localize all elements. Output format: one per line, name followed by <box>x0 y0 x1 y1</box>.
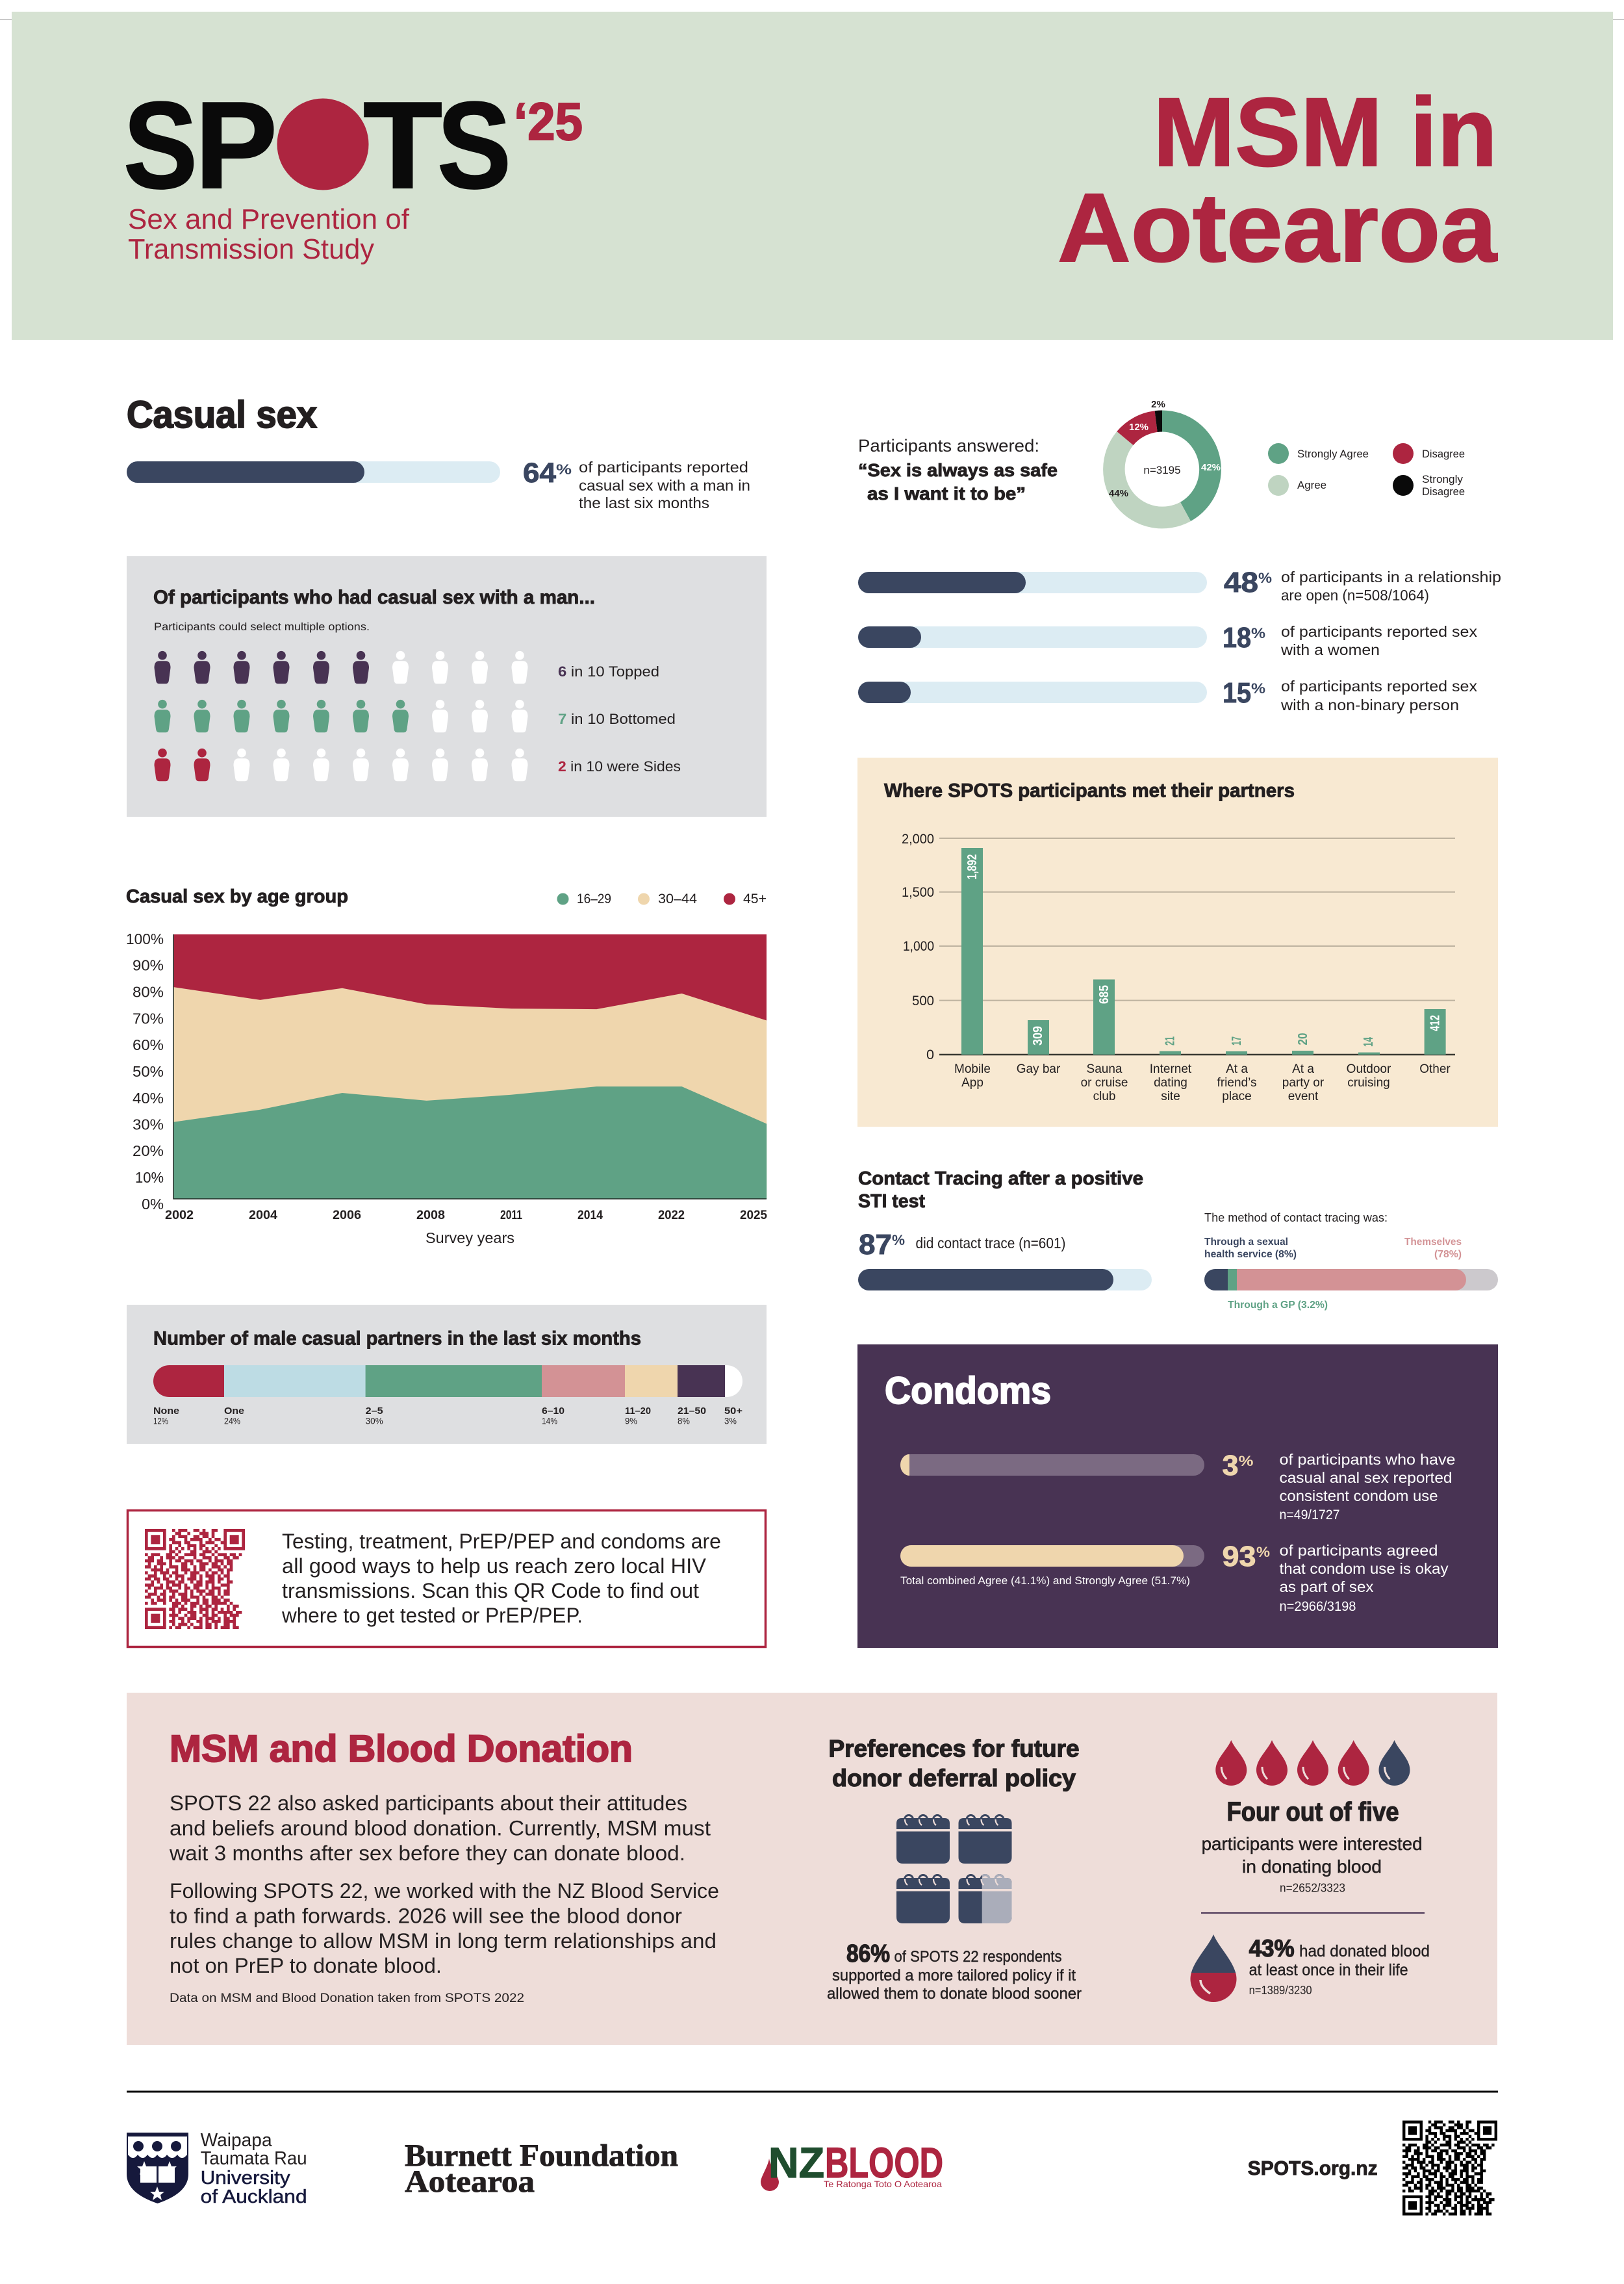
x axis labels: 2022 <box>658 1209 685 1222</box>
contact tracing method bar: (78%) <box>1434 1249 1462 1260</box>
bar category labels: Internet <box>1150 1062 1192 1076</box>
segment labels: 50+ <box>724 1405 742 1417</box>
bar value labels <box>965 854 1442 1047</box>
bar value labels: 14 <box>1362 1036 1376 1047</box>
panel: where participants met partners <box>857 758 1498 1127</box>
main title <box>1058 77 1498 282</box>
body text <box>169 1791 719 1977</box>
logo: University of Auckland: Taumata Rau <box>201 2148 307 2169</box>
pictogram row: topped <box>155 651 659 684</box>
stat: 43 percent: had donated blood <box>1299 1942 1430 1960</box>
donut legend <box>1268 443 1465 498</box>
QR code: website <box>1402 2122 1497 2214</box>
body text: not on PrEP to donate blood. <box>170 1954 442 1977</box>
logo: NZ Blood <box>761 2138 943 2191</box>
website link: SPOTS.org.nz <box>1248 2157 1378 2179</box>
logo subtitle <box>128 203 410 265</box>
panel: MSM and blood donation <box>127 1693 1497 2045</box>
y axis labels: 20% <box>133 1142 164 1159</box>
bar category labels: or cruise <box>1081 1076 1128 1090</box>
contact tracing heading: STI test <box>858 1191 925 1212</box>
stat: 87 percent contact trace: % <box>892 1232 905 1248</box>
SPOTS logo: ‘25 <box>514 92 583 151</box>
bar category labels <box>954 1062 1451 1103</box>
segment labels: 14% <box>542 1415 557 1426</box>
stat: 18 percent sex with women: 18 <box>1223 622 1251 654</box>
chart legend: 45+ <box>743 892 767 906</box>
segment labels: 11–20 <box>625 1405 651 1417</box>
stat: 93 percent agreed: of participants agreed <box>1280 1542 1438 1559</box>
stat: 93 percent agreed: as part of sex <box>1280 1578 1374 1595</box>
segment labels: 8% <box>678 1415 690 1426</box>
segment labels: One <box>224 1405 244 1417</box>
segment labels: 12% <box>153 1415 168 1426</box>
stat: 93 percent agreed <box>900 1541 1449 1614</box>
stat: 43 percent: n=1389/3230 <box>1249 1984 1312 1997</box>
stat: 48 percent open relationship: 48 <box>1224 567 1258 598</box>
stat: 64 percent casual sex: casual sex with a man in <box>579 477 750 494</box>
logo: University of Auckland: University <box>201 2168 290 2188</box>
callout text: all good ways to help us reach zero local HIV <box>282 1554 707 1578</box>
y axis labels: 40% <box>133 1090 164 1107</box>
donut legend: Agree <box>1297 479 1326 491</box>
bar category labels: At a <box>1292 1062 1314 1076</box>
SPOTS logo: S <box>437 77 511 214</box>
panel: number of male casual partners <box>127 1305 767 1444</box>
bar category labels: friend’s <box>1217 1076 1256 1090</box>
segment labels: 2–5 <box>366 1405 383 1417</box>
panel: positions pictogram <box>127 556 767 817</box>
logo: NZ Blood: Te Ratonga Toto O Aotearoa <box>824 2179 942 2189</box>
stat: 15 percent sex with non-binary person: with a non-binary person <box>1280 697 1459 713</box>
y axis labels: 1,000 <box>903 939 934 954</box>
donut legend: Strongly <box>1422 473 1463 485</box>
contact tracing method bar: health service (8%) <box>1204 1249 1297 1260</box>
body text: Following SPOTS 22, we worked with the NZ Blood Service <box>170 1879 719 1903</box>
panel: condoms <box>857 1344 1498 1648</box>
stat: 48 percent open relationship: % <box>1258 570 1272 586</box>
bar category labels: event <box>1288 1090 1319 1103</box>
panel heading: Of participants who had casual sex with a man... <box>153 587 595 608</box>
heading: casual sex: Casual sex <box>127 394 317 436</box>
contact tracing method bar: Through a sexual <box>1204 1237 1288 1248</box>
stat: 43 percent <box>1249 1935 1430 1997</box>
donut chart: 12% <box>1129 422 1148 433</box>
SPOTS logo: T <box>363 77 442 214</box>
stat: 15 percent sex with non-binary person: 15 <box>1223 677 1251 709</box>
y axis labels: 10% <box>135 1169 164 1186</box>
stat: 18 percent sex with women: % <box>1251 625 1265 641</box>
question text: as I want it to be” <box>867 483 1026 504</box>
deferral policy heading: Preferences for future <box>829 1735 1080 1762</box>
header banner <box>12 12 1613 340</box>
contact tracing method bar <box>1204 1211 1498 1311</box>
stat: 64 percent casual sex: % <box>556 461 572 478</box>
bar chart grid and axis <box>939 838 1455 1055</box>
panel heading: Where SPOTS participants met their partners <box>884 780 1295 802</box>
logo subtitle: Transmission Study <box>128 233 374 265</box>
panel heading: MSM and Blood Donation <box>170 1728 633 1770</box>
y axis labels: 2,000 <box>902 832 934 847</box>
chart: casual sex by age group <box>126 886 767 1246</box>
data source note: Data on MSM and Blood Donation taken from SPOTS 2022 <box>170 1992 524 2005</box>
bar category labels: At a <box>1226 1062 1248 1076</box>
bar category labels: Mobile <box>954 1062 991 1076</box>
stat: 64 percent casual sex <box>127 457 750 511</box>
logo: NZ Blood: BLOOD <box>825 2138 943 2187</box>
contact tracing method bar: Themselves <box>1404 1237 1462 1248</box>
logo: University of Auckland: Waipapa <box>201 2130 272 2151</box>
y axis labels <box>902 832 934 1062</box>
logo: NZ Blood: NZ <box>768 2138 824 2187</box>
segment labels: 3% <box>724 1415 737 1426</box>
bar category labels: App <box>961 1076 983 1090</box>
x axis labels: Survey years <box>425 1229 514 1246</box>
bar category labels: party or <box>1282 1076 1325 1090</box>
chart heading: Casual sex by age group <box>126 886 348 907</box>
bar category labels: site <box>1161 1090 1180 1103</box>
callout text: Testing, treatment, PrEP/PEP and condoms are <box>282 1530 721 1553</box>
stat: 93 percent agreed: that condom use is okay <box>1280 1560 1449 1577</box>
y axis labels: 1,500 <box>902 885 934 900</box>
chart legend <box>557 892 767 906</box>
main title: Aotearoa <box>1058 173 1498 282</box>
x axis labels: 2006 <box>333 1209 361 1222</box>
bar category labels: club <box>1093 1090 1115 1103</box>
bar category labels: Other <box>1419 1062 1451 1076</box>
x axis labels: 2025 <box>740 1209 767 1222</box>
question text: “Sex is always as safe <box>858 460 1058 480</box>
stat: 48 percent open relationship <box>858 567 1501 604</box>
SPOTS logo <box>123 77 583 214</box>
logo: Burnett Foundation Aotearoa <box>405 2138 678 2199</box>
segmented bar <box>153 1365 742 1397</box>
stat: 18 percent sex with women: with a women <box>1280 641 1380 658</box>
stat: 18 percent sex with women <box>858 622 1478 658</box>
y axis labels: 80% <box>133 984 164 1001</box>
pictogram row: bottomed <box>155 700 676 732</box>
x axis labels: 2004 <box>249 1209 277 1222</box>
question text <box>858 436 1058 504</box>
bar value labels: 20 <box>1296 1033 1310 1045</box>
stat: 18 percent sex with women: of participants reported sex <box>1281 623 1478 640</box>
stat: four out of five: participants were interested <box>1202 1834 1423 1854</box>
bar category labels: Outdoor <box>1347 1062 1391 1076</box>
stat: 93 percent agreed: % <box>1256 1544 1270 1560</box>
callout text <box>281 1530 721 1627</box>
x axis labels: 2011 <box>500 1209 522 1222</box>
stat: 64 percent casual sex: of participants reported <box>579 459 748 476</box>
segment labels: 30% <box>366 1415 383 1426</box>
stat: 93 percent agreed: Total combined Agree (41.1%) and Strongly Agree (51.7%) <box>900 1574 1190 1587</box>
donut chart: n=3195 <box>1143 464 1181 476</box>
pictogram row: topped: 6 in 10 Topped <box>558 663 659 680</box>
donut legend: Disagree <box>1422 448 1465 460</box>
stat: 3 percent consistent use: consistent condom use <box>1280 1487 1438 1504</box>
segment labels: 6–10 <box>542 1405 565 1417</box>
segment labels: 21–50 <box>678 1405 706 1417</box>
stat: four out of five <box>1202 1797 1423 1895</box>
SPOTS logo: P <box>195 77 277 214</box>
contact tracing method bar: Through a GP (3.2%) <box>1228 1300 1328 1311</box>
stat: four out of five: in donating blood <box>1242 1856 1382 1877</box>
x axis labels <box>165 1209 767 1246</box>
stat: four out of five: n=2652/3323 <box>1280 1882 1345 1895</box>
stacked area plot <box>173 934 767 1199</box>
bars <box>961 848 1446 1055</box>
bar category labels: Sauna <box>1087 1062 1123 1076</box>
stat: 93 percent agreed: 93 <box>1223 1541 1256 1572</box>
stat: 3 percent consistent use: casual anal sex reported <box>1280 1469 1453 1486</box>
QR code <box>145 1530 245 1628</box>
logo: University of Auckland <box>127 2130 307 2207</box>
body text: to find a path forwards. 2026 will see the blood donor <box>170 1904 682 1927</box>
question text: Participants answered: <box>858 436 1039 456</box>
body text: SPOTS 22 also asked participants about their attitudes <box>170 1791 687 1815</box>
chart legend: 30–44 <box>658 892 697 906</box>
logo subtitle: Sex and Prevention of <box>128 203 410 235</box>
stat: 3 percent consistent use <box>900 1450 1455 1522</box>
stat: 15 percent sex with non-binary person <box>858 677 1478 713</box>
bar value labels: 21 <box>1163 1036 1177 1046</box>
segment labels <box>153 1405 742 1426</box>
y axis labels: 0% <box>142 1196 164 1213</box>
deferral policy heading <box>829 1735 1080 1791</box>
pictogram row: sides: 2 in 10 were Sides <box>558 758 681 775</box>
segment labels: 9% <box>625 1415 637 1426</box>
stat: 43 percent: at least once in their life <box>1249 1961 1408 1979</box>
donut chart: 42% <box>1201 462 1221 473</box>
stat: 43 percent: 43% <box>1249 1935 1295 1962</box>
stat: 15 percent sex with non-binary person: of participants reported sex <box>1281 678 1478 695</box>
donut chart: 2% <box>1151 399 1165 410</box>
stat: 87 percent contact trace: did contact trace (n=601) <box>916 1235 1065 1251</box>
stat: 3 percent consistent use: % <box>1238 1453 1254 1469</box>
icon: half filled blood drop <box>1190 1934 1237 2002</box>
pictogram row: bottomed: 7 in 10 Bottomed <box>558 711 676 727</box>
y axis labels: 0 <box>926 1047 934 1062</box>
y axis labels: 90% <box>133 956 164 973</box>
stat: 86 percent: of SPOTS 22 respondents <box>894 1948 1061 1966</box>
stat: 48 percent open relationship: are open (n=508/1064) <box>1281 587 1429 604</box>
stat: 86 percent: 86% <box>846 1940 890 1968</box>
y axis labels: 60% <box>133 1036 164 1053</box>
logo: Burnett Foundation Aotearoa: Aotearoa <box>405 2164 535 2199</box>
stat: 48 percent open relationship: of participants in a relationship <box>1281 569 1501 585</box>
logo: University of Auckland: of Auckland <box>201 2187 307 2207</box>
stat: 15 percent sex with non-binary person: % <box>1251 680 1265 697</box>
icon: calendars <box>896 1816 1012 1923</box>
stat: 87 percent contact trace: 87 <box>859 1229 892 1261</box>
y axis labels <box>126 930 164 1213</box>
panel heading: Condoms <box>885 1370 1051 1412</box>
panel heading: Number of male casual partners in the last six months <box>153 1328 641 1349</box>
bar value labels: 1,892 <box>965 854 980 880</box>
callout text: where to get tested or PrEP/PEP. <box>281 1604 583 1627</box>
donut chart: 44% <box>1109 488 1128 499</box>
contact tracing heading: Contact Tracing after a positive <box>858 1168 1143 1189</box>
bar value labels: 309 <box>1031 1026 1045 1046</box>
chart legend: 16–29 <box>577 892 611 906</box>
callout text: transmissions. Scan this QR Code to find out <box>282 1579 699 1602</box>
x axis labels: 2002 <box>165 1209 194 1222</box>
stat: 3 percent consistent use: n=49/1727 <box>1280 1508 1339 1522</box>
main title: MSM in <box>1153 77 1497 186</box>
pictogram row: sides <box>155 749 681 781</box>
donut legend: Disagree <box>1422 485 1465 498</box>
y axis labels: 30% <box>133 1116 164 1133</box>
y axis labels: 500 <box>912 994 934 1008</box>
deferral policy heading: donor deferral policy <box>832 1765 1076 1791</box>
icon: five blood drops <box>1215 1740 1410 1786</box>
stat: 87 percent contact trace <box>858 1229 1152 1290</box>
SPOTS logo: S <box>123 77 197 214</box>
stat: 3 percent consistent use: 3 <box>1223 1450 1238 1482</box>
stat: 86 percent: allowed them to donate blood sooner <box>827 1985 1082 2003</box>
x axis labels: 2008 <box>416 1209 445 1222</box>
y axis labels: 100% <box>126 930 164 947</box>
bar value labels: 17 <box>1230 1036 1244 1046</box>
body text: rules change to allow MSM in long term relationships and <box>170 1929 717 1953</box>
bar category labels: cruising <box>1347 1076 1390 1090</box>
x axis labels: 2014 <box>577 1209 603 1222</box>
segment labels: 24% <box>224 1415 240 1426</box>
stat: 64 percent casual sex: 64 <box>523 457 556 489</box>
bar category labels: Gay bar <box>1017 1062 1061 1076</box>
bar category labels: place <box>1222 1090 1252 1103</box>
contact tracing heading <box>858 1168 1143 1212</box>
y axis labels: 50% <box>133 1063 164 1080</box>
bar category labels: dating <box>1154 1076 1187 1090</box>
stat: 86 percent <box>827 1940 1082 2003</box>
stat: 64 percent casual sex: the last six months <box>579 494 709 511</box>
y axis labels: 70% <box>133 1010 164 1027</box>
body text: wait 3 months after sex before they can donate blood. <box>169 1841 685 1865</box>
stat: four out of five: Four out of five <box>1226 1797 1399 1827</box>
bar value labels: 412 <box>1428 1015 1442 1031</box>
panel note: Participants could select multiple options. <box>154 621 370 633</box>
stat: 93 percent agreed: n=2966/3198 <box>1280 1599 1356 1614</box>
donut legend: Strongly Agree <box>1297 448 1369 460</box>
stat: 3 percent consistent use: of participants who have <box>1280 1451 1455 1468</box>
callout: testing and prevention QR <box>127 1510 765 1647</box>
bar value labels: 685 <box>1097 985 1111 1004</box>
stat: 86 percent: supported a more tailored policy if it <box>832 1967 1076 1984</box>
contact tracing method bar: The method of contact tracing was: <box>1204 1211 1388 1224</box>
body text: and beliefs around blood donation. Currently, MSM must <box>170 1817 711 1840</box>
logo: Burnett Foundation Aotearoa: Burnett Foundation <box>405 2138 678 2173</box>
donut chart <box>1103 399 1221 528</box>
segment labels: None <box>153 1405 179 1417</box>
